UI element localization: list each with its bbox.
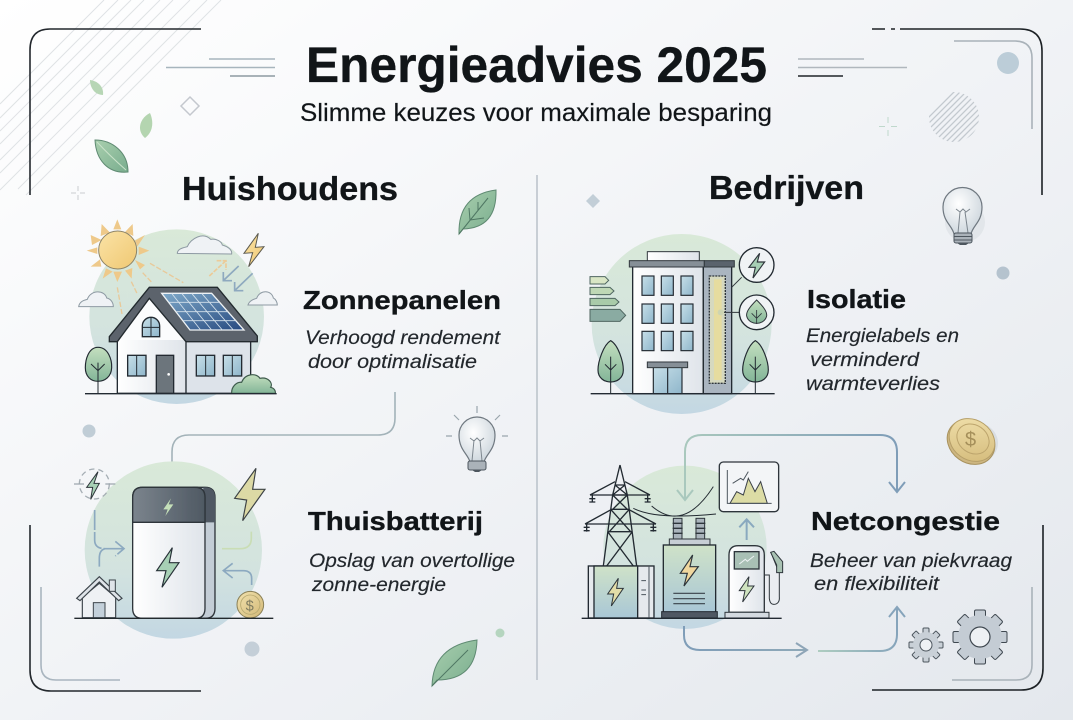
vertical divider (536, 175, 538, 680)
description: Energielabels en (806, 326, 959, 347)
icon: leaf bottom centre (432, 640, 477, 686)
title: Energieadvies 2025 (306, 37, 767, 93)
panel: Thuisbatterij (74, 461, 515, 639)
description: warmteverlies (806, 374, 941, 395)
small decor shapes (71, 52, 1019, 656)
icon: lightbulb right (943, 188, 985, 245)
subtitle: Slimme keuzes voor maximale besparing (300, 99, 772, 127)
arrow: zonnepanelen to thuisbatterij (166, 392, 395, 479)
description: Opslag van overtollige (309, 551, 515, 572)
description: door optimalisatie (308, 352, 477, 373)
large gear (953, 610, 1007, 664)
panel: Netcongestie (582, 462, 1012, 629)
icon: leaf top centre (459, 190, 496, 234)
heading: Bedrijven: Bedrijven (709, 169, 864, 206)
heading: Isolatie (807, 284, 906, 314)
heading: Huishoudens: Huishoudens (182, 170, 398, 207)
description: Verhoogd rendement (305, 328, 501, 349)
illustration: grid infrastructure (582, 462, 783, 629)
icon: gears (909, 610, 1007, 664)
illustration: home battery: $ (246, 599, 254, 615)
illustration: home battery (74, 461, 273, 639)
panel: Isolatie (590, 234, 959, 414)
background diagonal hatching (0, 0, 221, 195)
title side lines (166, 59, 907, 76)
heading: Thuisbatterij (308, 506, 483, 536)
illustration: house with solar panels (79, 219, 277, 404)
icon: coin (938, 410, 1004, 474)
icon: lightbulb middle with rays (446, 406, 508, 472)
description: zonne-energie (311, 575, 446, 596)
heading: Zonnepanelen (303, 285, 501, 315)
arrow: top loop to substation and to netcongestie (677, 435, 905, 500)
decorative leaves top left (90, 80, 152, 172)
arrow: bottom loop (684, 607, 905, 657)
description: verminderd (810, 350, 921, 371)
icon: coin: $ (965, 429, 976, 451)
panel: Zonnepanelen (79, 219, 501, 404)
small gear (909, 628, 943, 662)
description: Beheer van piekvraag (810, 551, 1012, 572)
heading: Netcongestie (811, 506, 1000, 536)
description: en flexibiliteit (814, 574, 940, 595)
illustration: insulated building (590, 234, 775, 414)
